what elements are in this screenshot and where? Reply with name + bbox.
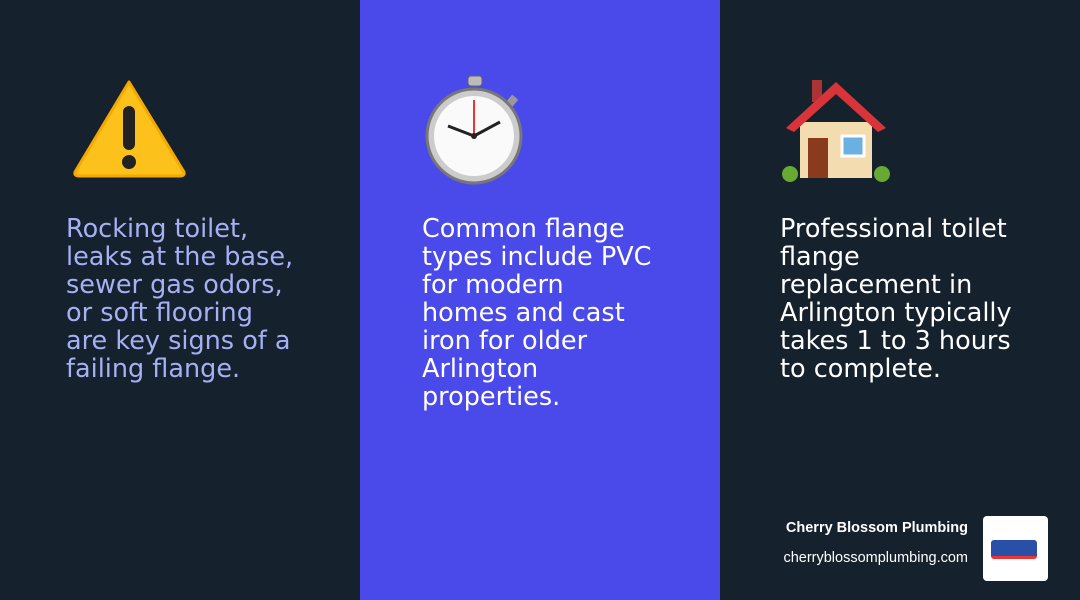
icon: house [782, 80, 890, 182]
panel: duration [720, 0, 1080, 600]
icon: stopwatch [426, 76, 522, 184]
panel: signs [0, 0, 360, 600]
text: flange types: Common flange types include PVC for modern homes and cast iron for older Arlington properties. [422, 214, 651, 412]
brand url: cherryblossomplumbing.com [783, 550, 968, 566]
text: duration: Professional toilet flange replacement in Arlington typically takes 1 to 3 hours to complete. [780, 214, 1012, 384]
text: signs: Rocking toilet, leaks at the base, sewer gas odors, or soft flooring are key signs of a failing flange. [66, 214, 293, 384]
logo [983, 516, 1048, 581]
panel: flange types [360, 0, 720, 600]
brand name: Cherry Blossom Plumbing [786, 520, 968, 536]
icon: warning [73, 80, 186, 178]
footer: brand [783, 516, 1048, 581]
